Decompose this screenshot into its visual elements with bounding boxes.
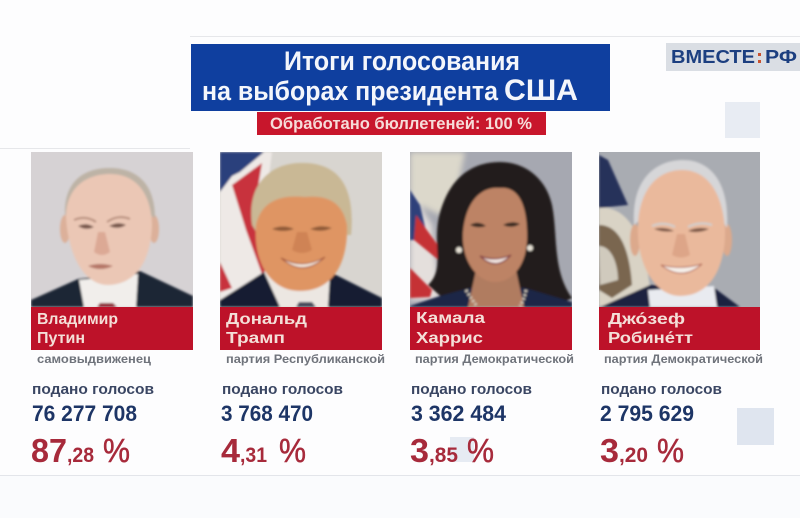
name banner: Trump [220,307,382,350]
percentage: Trump [221,432,306,469]
name banner: Biden: Робине́тт [608,330,693,347]
name banner: Putin [31,307,193,350]
percentage: Putin [31,432,130,469]
percentage: Putin: 87 [31,432,67,469]
percentage: Trump: 4 [221,432,241,469]
title banner: США [504,74,578,107]
name banner: Trump: Трамп [226,330,285,347]
percentage: Trump: % [279,432,306,469]
votes label: Trump: подано голосов [222,382,343,398]
percentage: Harris: % [467,432,494,469]
votes label: Biden: подано голосов [601,382,722,398]
votes label: Harris: подано голосов [411,382,532,398]
logo: ВМЕСТЕ:РФ [666,43,800,71]
name banner: Putin: Владимир [37,311,118,328]
subtitle: ballots processed: Обработано бюллетеней: 100 % [270,114,532,133]
party: Putin: самовыдвиженец [37,354,151,366]
percentage: Putin: ,28 [67,444,94,467]
name banner: Harris [410,307,572,350]
percentage: Trump: ,31 [240,444,267,467]
title banner: на выборах президента [202,76,499,106]
votes count: Trump: 3 768 470 [221,401,313,426]
party: Trump: партия Республиканской [226,354,385,366]
title banner [191,44,610,111]
party: Harris: партия Демократической [415,354,574,366]
party: Biden: партия Демократической [604,354,763,366]
votes count: Putin: 76 277 708 [32,401,137,426]
percentage: Biden [600,432,684,469]
votes label: Putin: подано голосов [32,382,154,398]
votes count: Harris: 3 362 484 [411,401,506,426]
portrait: Biden [599,152,760,307]
percentage: Biden: % [657,432,684,469]
percentage: Biden: 3 [600,432,619,469]
logo: ВМЕСТЕ:РФ: ВМЕСТЕ [671,47,755,67]
portrait: Trump [220,152,382,307]
percentage: Putin: % [103,432,130,469]
percentage: Harris: 3 [410,432,429,469]
name banner: Trump: Дональд [226,311,307,328]
percentage: Harris: ,85 [429,444,458,467]
name banner: Harris: Харрис [416,330,483,347]
portrait: Harris [410,152,572,307]
name banner: Harris: Камала [416,310,485,327]
votes count: Biden: 2 795 629 [600,401,694,426]
logo: ВМЕСТЕ:РФ: РФ [765,47,797,67]
portrait: Putin [31,152,193,307]
percentage: Biden: ,20 [619,444,648,467]
percentage: Harris [410,432,494,469]
name banner: Biden [599,307,760,350]
name banner: Biden: Джо́зеф [608,311,685,328]
title banner: Итоги голосования [284,46,520,76]
name banner: Putin: Путин [37,330,85,347]
